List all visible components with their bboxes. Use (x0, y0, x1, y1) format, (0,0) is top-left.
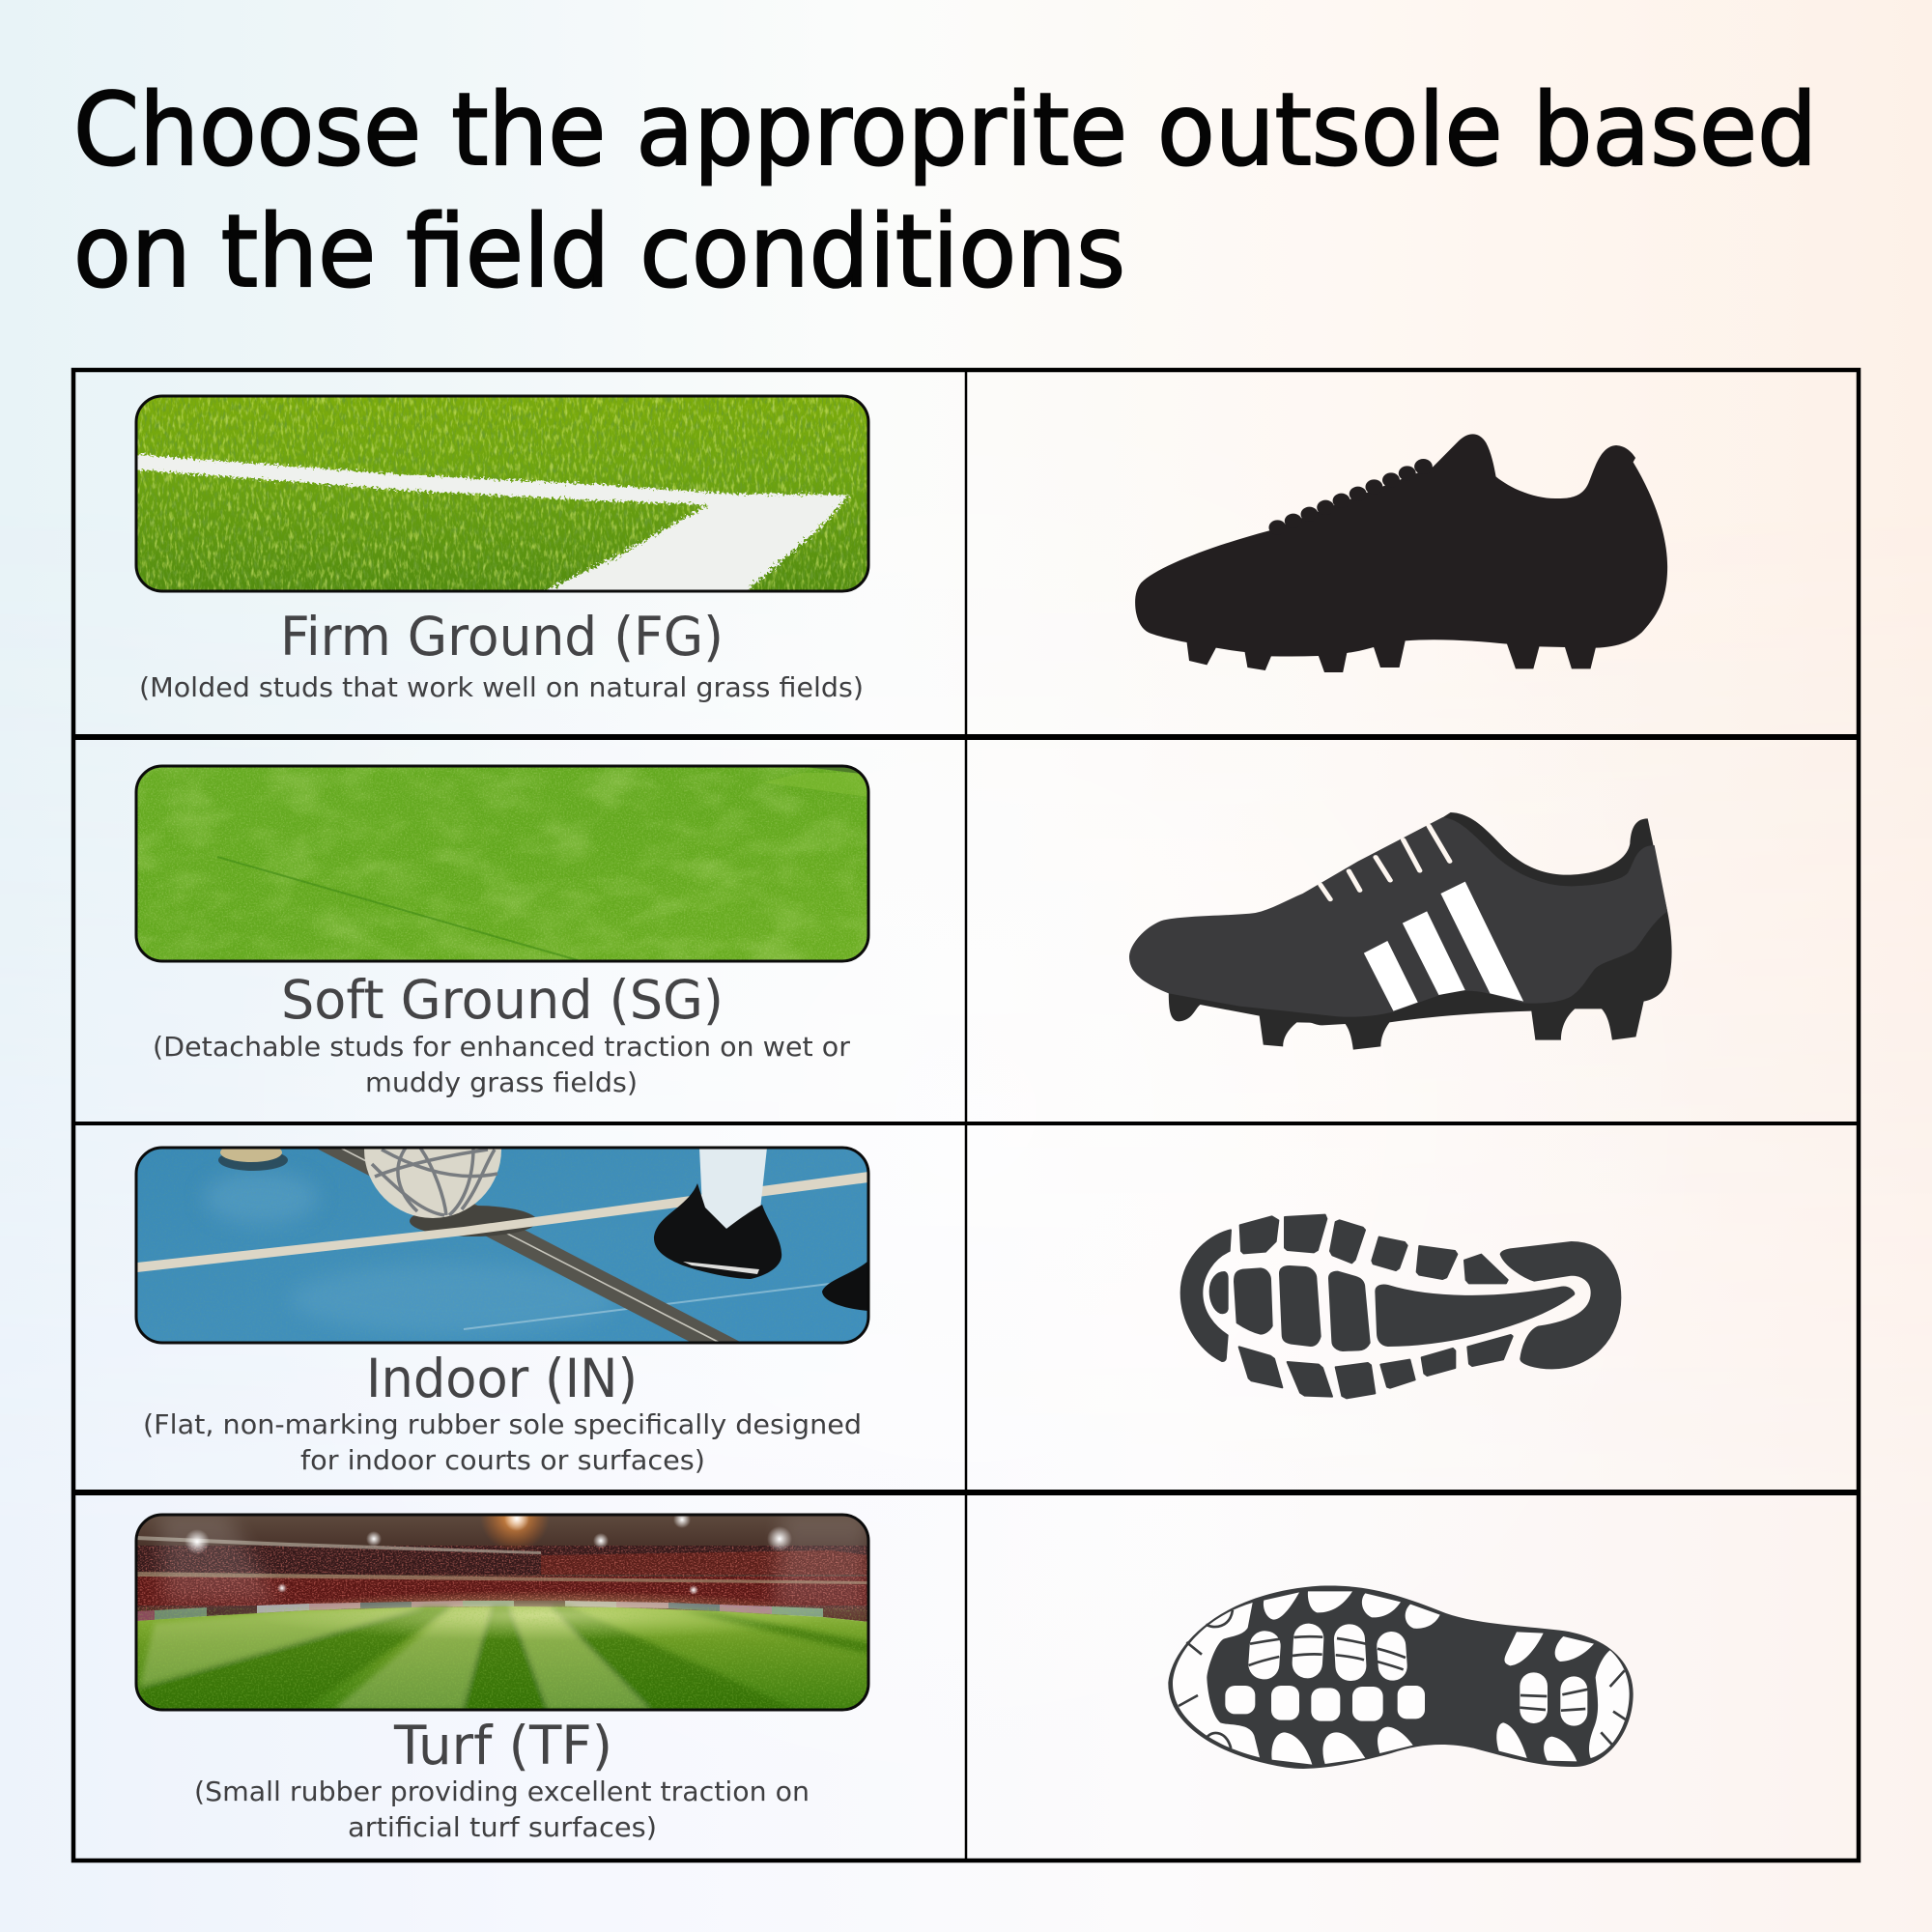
heading: soft ground: Soft Ground (SG) (281, 969, 724, 1031)
panel: indoor (135, 1146, 869, 1473)
pitch (136, 1590, 868, 1710)
second boot (822, 1261, 868, 1311)
panel: firm ground (130, 396, 868, 703)
title (73, 72, 1817, 310)
description: firm ground: (Molded studs that work well on natural grass fields) (139, 672, 864, 703)
icon: turf outsole tread (1168, 1585, 1634, 1769)
description: indoor (143, 1409, 862, 1476)
court line: dark seam (315, 1148, 742, 1343)
heading: indoor: Indoor (IN) (366, 1348, 638, 1409)
foot top left (218, 1150, 288, 1171)
leg and boot (654, 1148, 781, 1279)
ball (364, 1150, 501, 1218)
title: on the field conditions (73, 194, 1125, 310)
panel: turf (136, 1482, 868, 1843)
crowd stands (136, 1536, 868, 1611)
icon: soft ground boot with three stripes (1129, 812, 1672, 1050)
photo: smooth green lawn (136, 766, 868, 961)
description: soft ground: (Detachable studs for enhanced traction on wet or (153, 1032, 851, 1063)
title: Choose the approprite outsole based (73, 72, 1817, 188)
icon: indoor outsole tread (1181, 1215, 1620, 1398)
description: soft ground: muddy grass fields) (365, 1067, 638, 1098)
description: turf (194, 1776, 810, 1843)
photo: floodlit stadium (135, 1513, 869, 1712)
table grid (73, 370, 1859, 1861)
description: indoor: (Flat, non-marking rubber sole specifically designed (143, 1409, 862, 1440)
icon: firm ground boot silhouette (1135, 434, 1667, 672)
panel: soft ground (136, 766, 868, 1098)
photo: indoor court with ball and shoes (135, 1146, 869, 1345)
floodlights (185, 1482, 792, 1595)
heading: turf: Turf (TF) (393, 1715, 612, 1776)
floodlight beams (159, 1515, 868, 1615)
photo: grass pitch with white corner line (130, 396, 868, 595)
description: soft ground (153, 1032, 851, 1098)
description: turf: (Small rubber providing excellent traction on (194, 1776, 810, 1807)
advertising boards (137, 1601, 868, 1622)
description: turf: artificial turf surfaces) (348, 1812, 657, 1843)
description: indoor: for indoor courts or surfaces) (300, 1445, 705, 1476)
heading: firm ground: Firm Ground (FG) (280, 606, 724, 668)
